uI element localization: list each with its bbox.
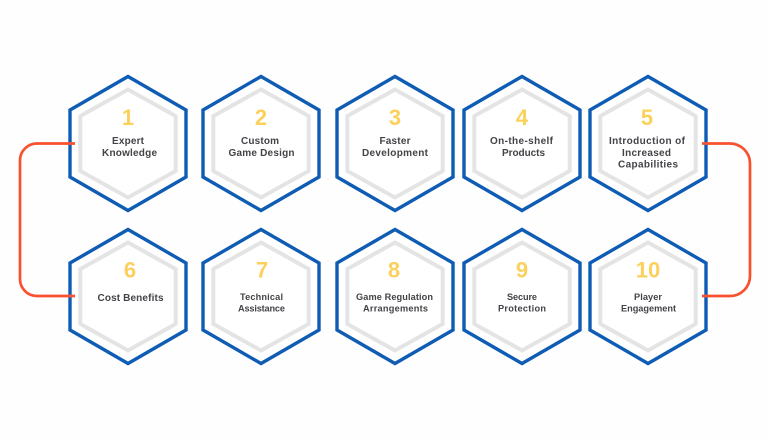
hexagon 6: Cost Benefits: 6 <box>124 258 136 282</box>
hexagon 1: Expert Knowledge: Expert <box>112 136 145 147</box>
hexagon 2: Custom Game Design: Custom <box>241 136 279 147</box>
connector: left, from hexagon 1 to hexagon 6 <box>20 144 75 296</box>
hexagon 1: Expert Knowledge: 1 <box>122 105 134 130</box>
hexagon 5: Introduction of Increased Capabilities: 5 <box>641 105 653 130</box>
hexagon 9: Secure Protection: Secure <box>507 292 537 302</box>
hexagon 10: Player Engagement: Engagement <box>621 304 676 314</box>
hexagon 4: On-the-shelf Products: Products <box>502 148 545 159</box>
hexagon 3: Faster Development: Development <box>362 148 429 159</box>
hexagon 9: Secure Protection: 9 <box>516 258 528 282</box>
hexagon 6: Cost Benefits <box>70 230 186 364</box>
connector: right, from hexagon 5 to hexagon 10 <box>702 144 750 296</box>
hexagon 8: Game Regulation Arrangements: Game Regulation <box>356 292 433 302</box>
hexagon 6: Cost Benefits: Cost Benefits <box>98 293 164 304</box>
hexagon 2: Custom Game Design: Game Design <box>228 148 294 159</box>
hexagon 1: Expert Knowledge: Knowledge <box>102 148 157 159</box>
hexagon 8: Game Regulation Arrangements: Arrangements <box>363 304 428 314</box>
hexagon 10: Player Engagement: 10 <box>636 258 660 282</box>
hexagon 9: Secure Protection <box>464 230 580 364</box>
hexagon 5: Introduction of Increased Capabilities: Capabilities <box>618 160 678 171</box>
hexagon 3: Faster Development: 3 <box>389 105 401 130</box>
hexagon 7: Technical Assistance <box>203 230 319 364</box>
hexagon 9: Secure Protection: Protection <box>498 304 546 314</box>
hexagon 5: Introduction of Increased Capabilities: Introduction of <box>609 136 686 147</box>
hexagon 2: Custom Game Design: 2 <box>255 105 267 130</box>
hexagon 8: Game Regulation Arrangements: 8 <box>388 258 400 282</box>
hexagon 4: On-the-shelf Products <box>464 76 580 210</box>
hexagon 4: On-the-shelf Products: 4 <box>516 105 529 130</box>
hexagon 5: Introduction of Increased Capabilities <box>590 76 706 210</box>
hexagon 10: Player Engagement <box>590 230 706 364</box>
hexagon 3: Faster Development: Faster <box>380 136 411 147</box>
hexagon 2: Custom Game Design <box>203 76 319 210</box>
hexagon 4: On-the-shelf Products: On-the-shelf <box>490 136 554 147</box>
hexagon 7: Technical Assistance: Technical <box>240 292 283 302</box>
hexagon 5: Introduction of Increased Capabilities: Increased <box>622 148 671 159</box>
hexagon 10: Player Engagement: Player <box>634 292 662 302</box>
hexagon 3: Faster Development <box>337 76 453 210</box>
hexagon 1: Expert Knowledge <box>70 76 186 210</box>
hexagon 7: Technical Assistance: Assistance <box>238 304 285 314</box>
hexagon 7: Technical Assistance: 7 <box>256 258 268 282</box>
hexagon 8: Game Regulation Arrangements <box>337 230 453 364</box>
